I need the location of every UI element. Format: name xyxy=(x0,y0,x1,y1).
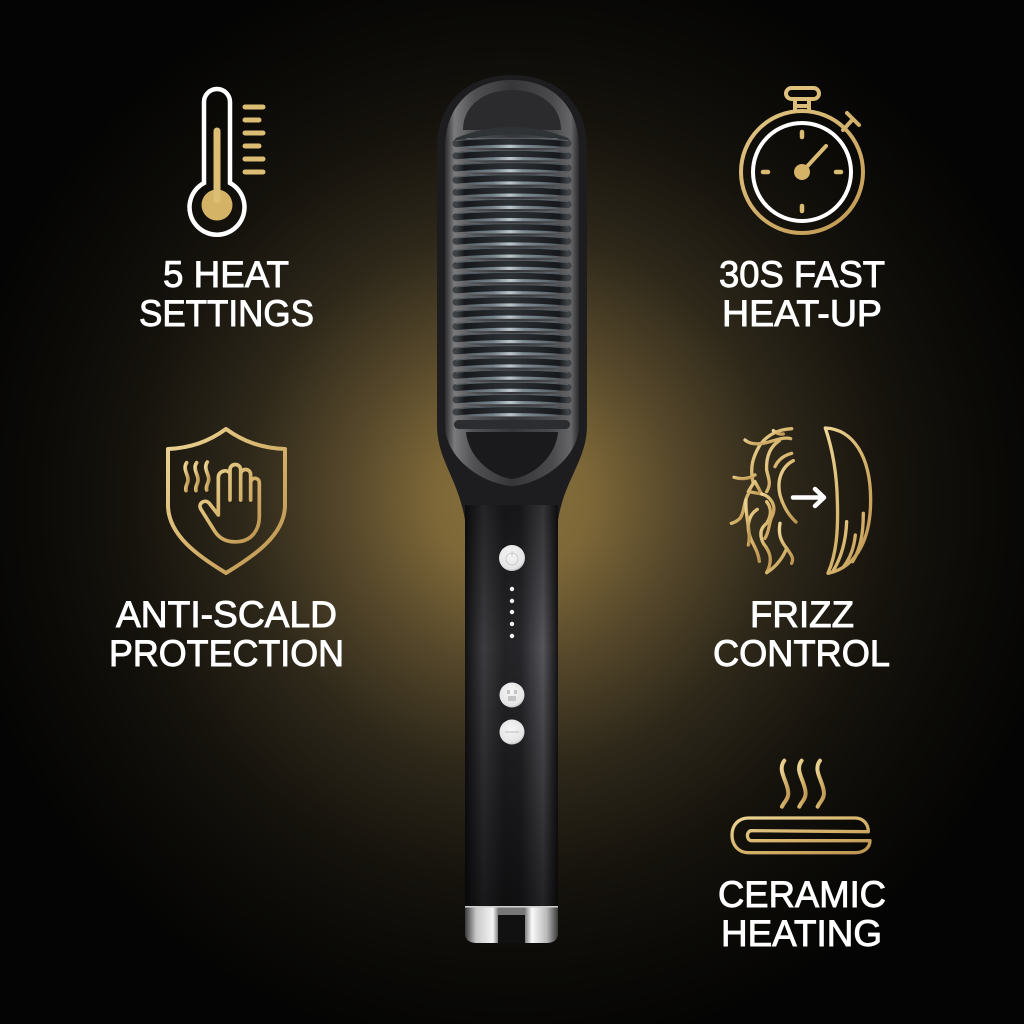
icon: frizzy to smooth hair xyxy=(731,428,871,573)
frizzy hair strands xyxy=(731,429,796,573)
handle shading xyxy=(465,505,558,910)
feature: frizz control xyxy=(713,428,890,674)
icon: heated ceramic plate xyxy=(732,761,870,853)
icon: stopwatch xyxy=(741,88,863,233)
label: CONTROL xyxy=(713,633,890,674)
label: CERAMIC xyxy=(718,874,886,915)
label: SETTINGS xyxy=(139,293,314,334)
handle xyxy=(465,505,558,910)
feature: 5 heat settings xyxy=(139,89,314,334)
feature: anti-scald protection xyxy=(109,429,344,674)
label: HEAT-UP xyxy=(722,293,882,334)
product: hair straightening brush xyxy=(437,75,587,943)
steam waves xyxy=(782,761,824,807)
feature: 30s fast heat-up xyxy=(719,88,885,334)
comb teeth xyxy=(452,127,572,429)
label: 30S FAST xyxy=(719,254,885,295)
icon: shield with hand and heat xyxy=(168,429,285,573)
brush head shell xyxy=(437,75,587,520)
label: ANTI-SCALD xyxy=(116,594,337,635)
mode button xyxy=(500,682,524,708)
label: HEATING xyxy=(721,913,882,954)
feature: ceramic heating xyxy=(718,761,886,954)
smooth hair outline xyxy=(825,428,871,573)
label xyxy=(719,254,885,334)
power button xyxy=(499,545,525,571)
label xyxy=(109,594,344,674)
minus button xyxy=(500,720,524,744)
metal end collar xyxy=(465,906,558,943)
label xyxy=(718,874,886,954)
upper dark dome xyxy=(463,90,561,130)
smooth hair strands xyxy=(833,513,863,571)
label: PROTECTION xyxy=(109,633,344,674)
label: FRIZZ xyxy=(750,594,854,635)
icon: thermometer xyxy=(189,89,263,235)
brush head inner plate xyxy=(445,80,579,486)
label xyxy=(139,254,314,334)
label: 5 HEAT xyxy=(163,254,289,295)
heat level dots xyxy=(510,587,514,638)
arrow xyxy=(793,489,824,506)
lower dark dome xyxy=(466,432,558,479)
label xyxy=(713,594,890,674)
ceramic plate xyxy=(732,818,870,853)
